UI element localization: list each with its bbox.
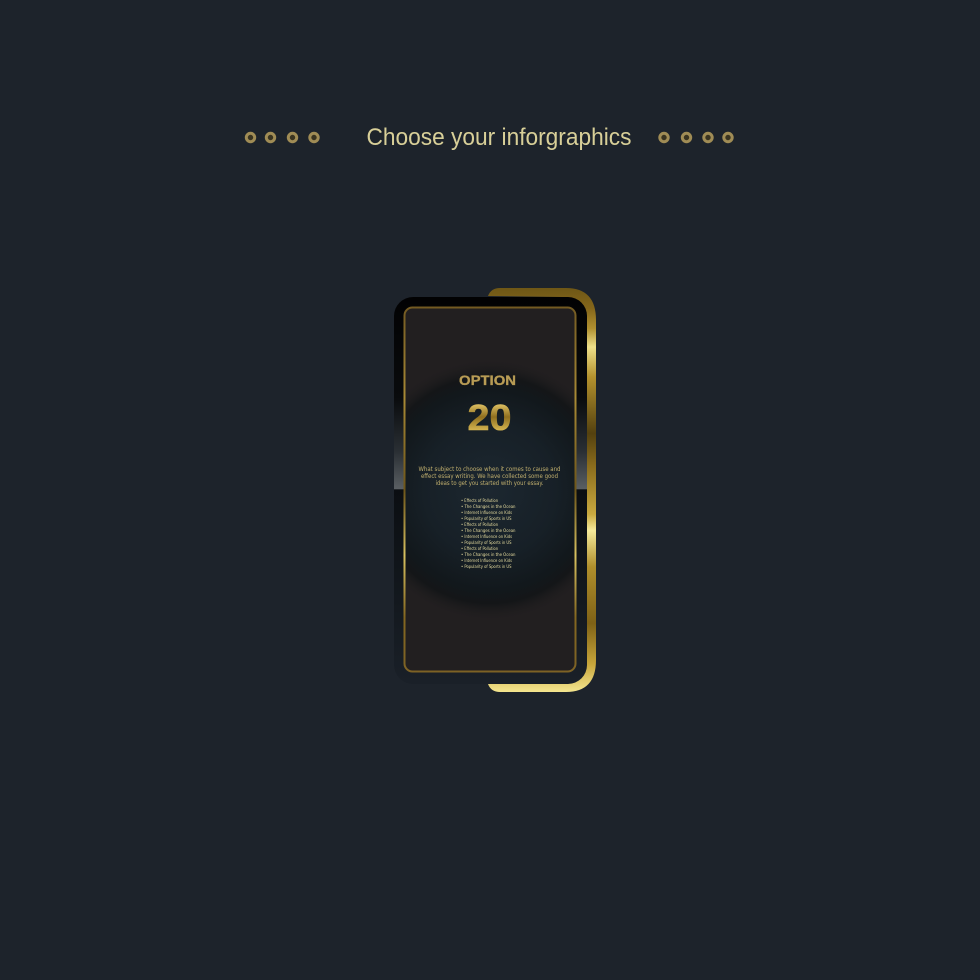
description: ideas to get you started with your essay. xyxy=(436,480,544,487)
topic list: • The Changes in the Ocean xyxy=(461,504,516,510)
option number: 20 xyxy=(468,397,512,438)
topic list: • Internet Influence on Kids xyxy=(461,558,513,564)
inner panel xyxy=(404,308,576,672)
topic list: • Effects of Pollution xyxy=(461,498,498,504)
topic list: • The Changes in the Ocean xyxy=(461,528,516,534)
topic list: • Popularity of Sports in US xyxy=(461,564,512,570)
option heading: OPTION xyxy=(459,373,516,388)
description: effect essay writing. We have collected some good xyxy=(421,473,558,480)
description xyxy=(418,466,561,487)
topic list: • Effects of Pollution xyxy=(461,546,498,552)
gold bracket xyxy=(488,288,596,692)
topic list: • Internet Influence on Kids xyxy=(461,510,513,516)
topic list: • The Changes in the Ocean xyxy=(461,552,516,558)
right row of dots xyxy=(660,133,732,142)
left row of dots xyxy=(246,133,318,142)
panel radial glow xyxy=(406,372,574,608)
topic list: • Popularity of Sports in US xyxy=(461,516,512,522)
option card xyxy=(394,288,596,692)
topic list: • Effects of Pollution xyxy=(461,522,498,528)
topic list: • Internet Influence on Kids xyxy=(461,534,513,540)
black card body xyxy=(394,297,587,684)
topic list: • Popularity of Sports in US xyxy=(461,540,512,546)
description: What subject to choose when it comes to cause and xyxy=(418,466,561,473)
topic list xyxy=(461,498,516,570)
title: Choose your inforgraphics xyxy=(366,124,632,151)
